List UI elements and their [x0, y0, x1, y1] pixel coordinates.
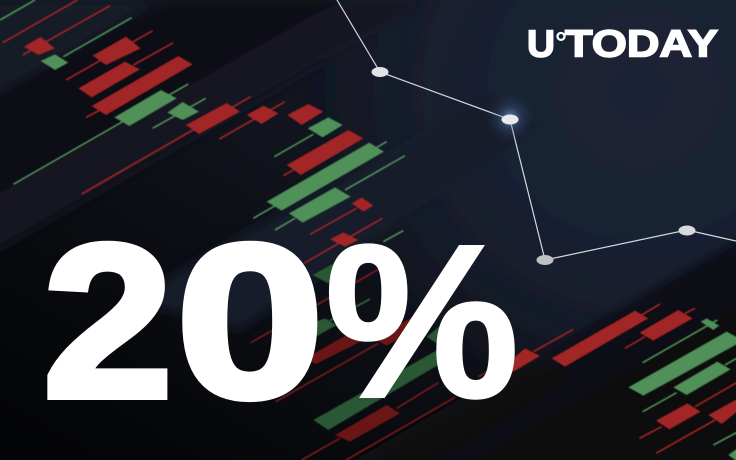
lower right candles	[500, 304, 736, 460]
glow behind highlighted node	[484, 92, 536, 144]
big 20% headline: 2	[43, 200, 173, 444]
middle candles behind the percent sign	[251, 197, 493, 460]
upper candles	[0, 0, 405, 230]
line chart	[337, 0, 736, 265]
big 20% headline	[43, 200, 519, 444]
logo: U.Today: TODAY	[565, 24, 718, 66]
logo: U.Today	[527, 24, 718, 66]
logo: U.Today: U	[527, 24, 555, 66]
logo: U.Today: °	[555, 26, 567, 60]
big 20% headline: %	[325, 200, 519, 444]
big 20% headline: 0	[176, 200, 324, 444]
